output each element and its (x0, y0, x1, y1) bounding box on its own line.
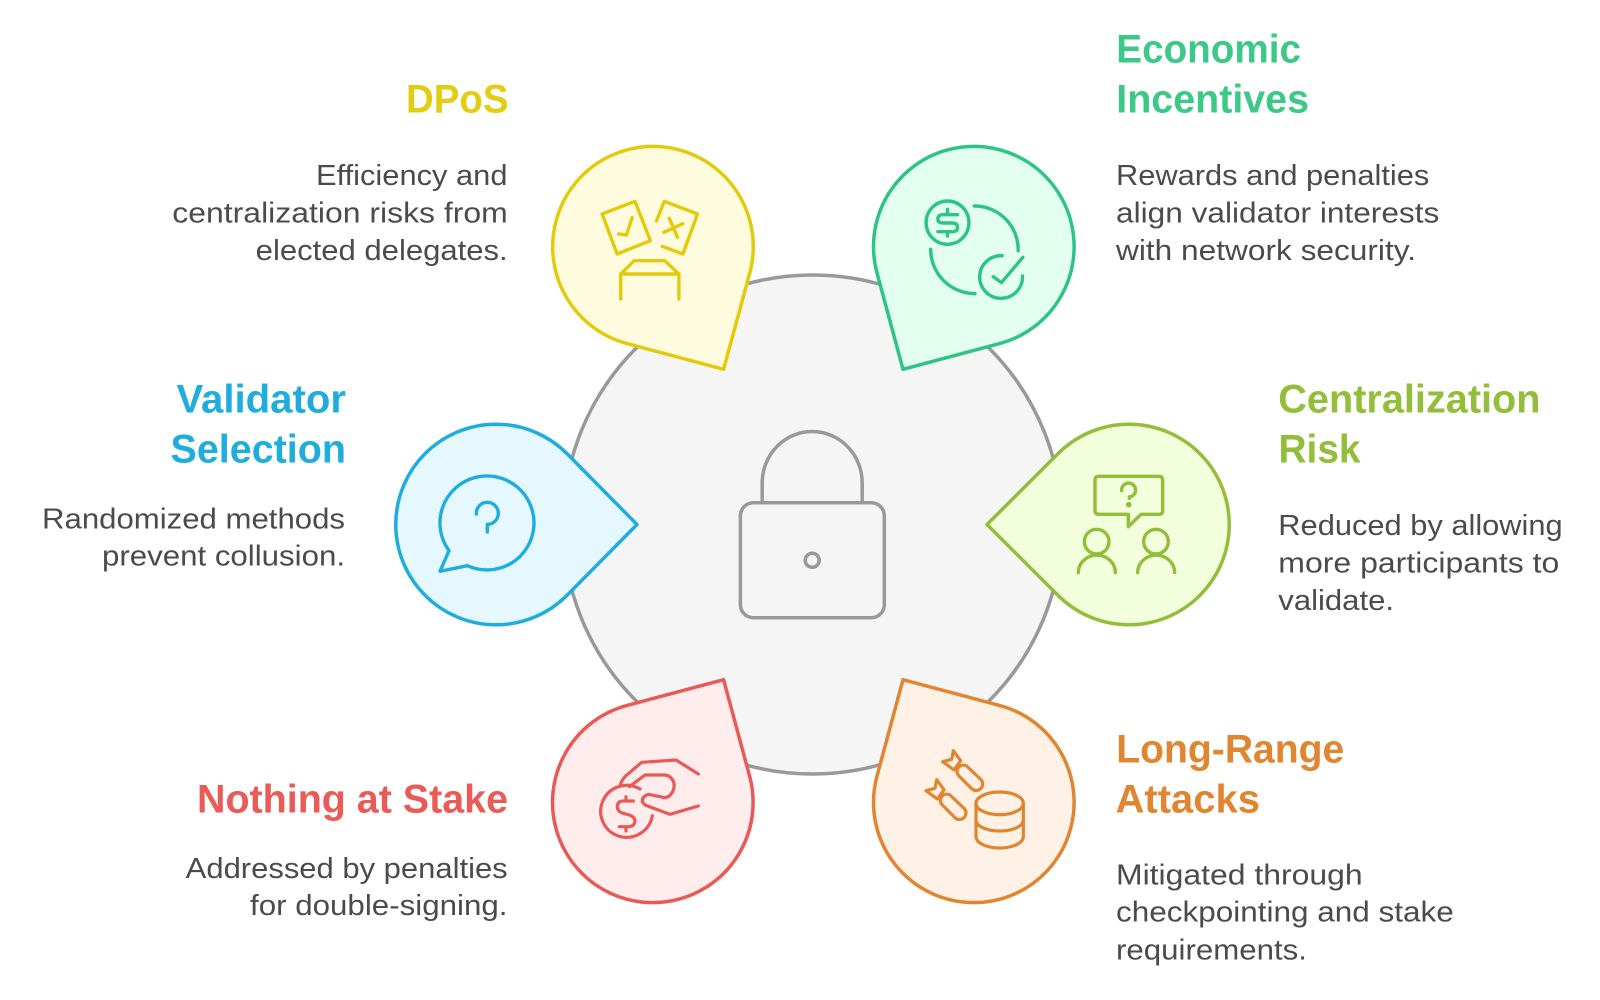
panel: Nothing at Stake teardrop (552, 680, 753, 903)
text: DPoS: DPoS (406, 78, 508, 122)
icon: bombs and database (926, 751, 1023, 848)
icon: central padlock (740, 432, 884, 618)
text: Economic Incentives: Rewards and penalties (1116, 160, 1429, 192)
central circle (563, 275, 1062, 774)
text: DPoS: centralization risks from (172, 198, 508, 230)
text: Centralization Risk (1278, 378, 1563, 617)
icon: ballot box (602, 201, 697, 299)
text: Centralization Risk: Centralization (1278, 378, 1540, 422)
text: DPoS: elected delegates. (256, 235, 508, 267)
text: Economic Incentives: Incentives (1116, 78, 1309, 122)
text: Centralization Risk: Risk (1278, 427, 1361, 471)
text: Nothing at Stake (186, 777, 508, 922)
panel: Economic Incentives teardrop (874, 146, 1074, 369)
icon: two people with question (1078, 476, 1175, 573)
text: Long-Range Attacks: Long-Range (1116, 728, 1344, 772)
text: Economic Incentives: with network security. (1115, 235, 1416, 267)
text: Nothing at Stake: for double-signing. (250, 890, 508, 922)
icon: hand holding coin (601, 760, 698, 837)
text: Long-Range Attacks (1116, 728, 1454, 966)
text: Validator Selection: Validator (176, 378, 346, 422)
text: Centralization Risk: more participants to (1278, 548, 1559, 580)
text: Centralization Risk: validate. (1278, 585, 1394, 617)
text: Nothing at Stake: Nothing at Stake (197, 777, 508, 821)
text: Validator Selection: Randomized methods (42, 504, 345, 536)
text: DPoS: Efficiency and (316, 160, 508, 192)
text: Economic Incentives: align validator interests (1116, 198, 1439, 230)
text: DPoS (172, 78, 509, 267)
text: Validator Selection (42, 378, 346, 572)
text: Validator Selection: prevent collusion. (102, 540, 345, 572)
panel: Centralization Risk teardrop (987, 424, 1229, 625)
text: Economic Incentives (1115, 28, 1439, 267)
text: Long-Range Attacks: Mitigated through (1116, 859, 1363, 891)
text: Long-Range Attacks: requirements. (1116, 934, 1307, 966)
text: Economic Incentives: Economic (1116, 28, 1301, 72)
panel: Validator Selection teardrop (396, 424, 637, 625)
text: Long-Range Attacks: checkpointing and stake (1116, 897, 1454, 929)
text: Long-Range Attacks: Attacks (1116, 778, 1260, 822)
text: Nothing at Stake: Addressed by penalties (186, 853, 508, 885)
text: Centralization Risk: Reduced by allowing (1278, 510, 1563, 542)
panel: Long-Range Attacks teardrop (874, 680, 1074, 903)
text: Validator Selection: Selection (170, 427, 346, 471)
icon: question speech bubble (440, 476, 534, 571)
panel: DPoS teardrop (553, 146, 753, 369)
icon: dollar and check cycle (926, 201, 1023, 298)
